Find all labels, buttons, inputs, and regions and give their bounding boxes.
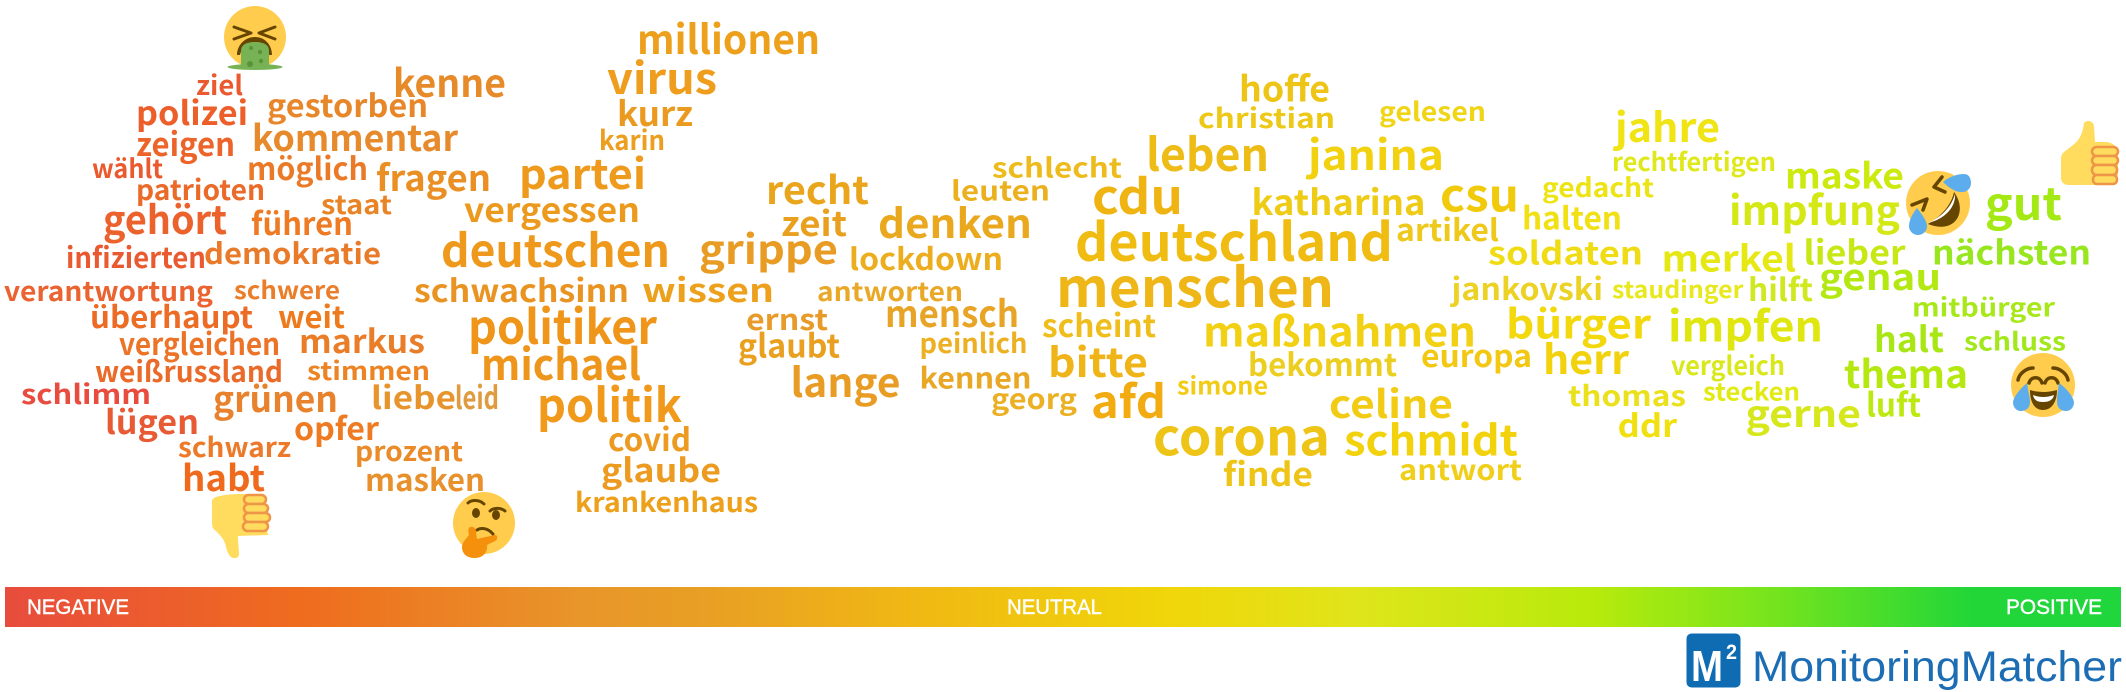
word group: negative terms: ziel <box>196 64 243 103</box>
word group: moderately negative terms: kommentar <box>252 110 458 162</box>
word group: neutral terms: janina <box>1305 122 1444 182</box>
word group: slightly negative terms: politiker <box>468 289 657 358</box>
word group: negative terms: überhaupt <box>90 293 253 337</box>
word group: moderately negative terms: stimmen <box>307 352 430 388</box>
word group: slightly negative terms: antworten <box>817 272 963 309</box>
word group: positive terms: ddr <box>1618 401 1678 446</box>
icon: rolling on the floor laughing emoji <box>1906 171 1971 235</box>
word group: neutral terms: finde <box>1223 449 1313 496</box>
word group: moderately negative terms: opfer <box>294 404 379 450</box>
word group: slightly negative terms: kurz <box>617 87 693 136</box>
word group: positive terms: rechtfertigen <box>1612 143 1776 179</box>
word group: slightly negative terms: schwachsinn <box>414 266 629 311</box>
word group: neutral terms: corona <box>1153 396 1330 470</box>
word group: slightly negative terms: glaube <box>601 445 721 492</box>
word group: slightly negative terms: peinlich <box>920 322 1028 361</box>
word group: neutral terms: schlecht <box>992 146 1122 186</box>
word group: neutral terms: bekommt <box>1248 340 1397 385</box>
word group: neutral terms: artikel <box>1396 206 1499 250</box>
word group: moderately negative terms: liebe <box>371 373 456 418</box>
word group: negative terms: polizei <box>136 87 248 135</box>
icon: thumbs down emoji <box>212 494 270 558</box>
word group: neutral terms: europa <box>1421 332 1532 376</box>
word group: moderately negative terms <box>204 53 506 500</box>
word group: negative terms: verantwortung <box>4 270 213 309</box>
word group: negative terms: schlimm <box>21 373 151 412</box>
word group: negative terms: lügen <box>105 396 199 444</box>
word group: negative terms: habt <box>182 450 265 502</box>
word group: positive terms: impfung <box>1729 178 1900 237</box>
icon: face with tears of joy emoji <box>2011 353 2075 417</box>
word group: positive terms: gut <box>1985 168 2062 233</box>
word group: slightly negative terms: michael <box>481 331 641 393</box>
label: negative: NEGATIVE <box>27 596 129 619</box>
word group: slightly negative terms <box>414 8 1077 520</box>
word group: positive terms: merkel <box>1662 230 1796 282</box>
word group: slightly negative terms: grippe <box>699 218 838 276</box>
word group: slightly negative terms: deutschen <box>441 215 670 280</box>
icon: vomiting face emoji <box>224 6 286 70</box>
word group: positive terms: lieber <box>1804 226 1906 274</box>
word group: slightly negative terms: mensch <box>885 284 1019 338</box>
word group: positive terms: vergleich <box>1671 346 1785 383</box>
word group: neutral terms: soldaten <box>1488 228 1643 274</box>
word group: slightly negative terms: partei <box>519 141 646 201</box>
word group: neutral terms: deutschland <box>1075 201 1393 276</box>
label: positive: POSITIVE <box>2006 596 2102 619</box>
word group: slightly negative terms: denken <box>878 192 1032 250</box>
word group: moderately negative terms: gestorben <box>267 81 428 126</box>
word group: negative terms: vergleichen <box>119 320 280 364</box>
word group: positive terms: hilft <box>1748 265 1813 310</box>
word group: positive terms: stecken <box>1703 373 1800 408</box>
word group: positive terms: thomas <box>1568 375 1686 415</box>
logo: MonitoringMatcher <box>1686 634 2122 691</box>
label: neutral: NEUTRAL <box>1007 596 1102 619</box>
word group: slightly negative terms: millionen <box>637 8 820 66</box>
word group: negative terms: zeigen <box>136 119 235 166</box>
word group: neutral terms: gelesen <box>1379 92 1486 129</box>
word group: slightly negative terms: vergessen <box>464 184 640 232</box>
word group: neutral terms: maßnahmen <box>1203 298 1476 358</box>
word group: moderately negative terms: prozent <box>355 430 463 469</box>
word group: negative terms: infizierten <box>66 235 206 277</box>
icon: thumbs up emoji <box>2061 121 2118 185</box>
word group: moderately negative terms: leid <box>455 373 499 418</box>
word group: slightly negative terms: wissen <box>642 265 774 312</box>
word group: slightly negative terms: kennen <box>920 356 1032 398</box>
word group: slightly negative terms: ernst <box>746 297 828 339</box>
word group: neutral terms: schmidt <box>1344 408 1518 468</box>
word group: positive terms: jahre <box>1612 96 1720 154</box>
word group: neutral terms: csu <box>1440 160 1519 224</box>
word group: moderately negative terms: staat <box>321 185 392 222</box>
logo wordmark: MonitoringMatcher <box>1752 643 2122 691</box>
word group: slightly negative terms: recht <box>766 160 869 215</box>
word group: neutral terms: afd <box>1091 366 1166 431</box>
word group: positive terms: thema <box>1844 344 1968 399</box>
word group: positive terms: genau <box>1819 249 1941 301</box>
word group: slightly negative terms: glaubt <box>738 320 840 368</box>
word group: neutral terms: katharina <box>1252 175 1426 226</box>
word group: slightly negative terms: lockdown <box>849 235 1003 279</box>
word group: slightly negative terms: virus <box>607 45 717 107</box>
word group: moderately negative terms: markus <box>299 316 425 363</box>
word group: moderately negative terms: masken <box>365 456 485 500</box>
word group: positive terms: gedacht <box>1542 168 1654 205</box>
word group: negative terms <box>4 64 291 502</box>
word group: neutral terms: antwort <box>1399 449 1522 489</box>
word group: neutral terms <box>992 62 1652 496</box>
word group: slightly negative terms: krankenhaus <box>575 481 758 520</box>
word group: negative terms: wählt <box>92 149 163 186</box>
logo mark: M squared: 2 <box>1726 641 1737 664</box>
word group: slightly negative terms: zeit <box>781 197 847 246</box>
word group: neutral terms: leben <box>1146 119 1269 184</box>
word group: slightly negative terms: georg <box>991 378 1077 418</box>
word group: positive terms: schluss <box>1964 322 2066 358</box>
word group: neutral terms: bitte <box>1048 331 1148 389</box>
word group: positive terms: halt <box>1874 312 1944 363</box>
word group: slightly negative terms: karin <box>599 119 665 158</box>
word group: slightly negative terms: politik <box>537 370 682 436</box>
word group: neutral terms: celine <box>1329 374 1453 429</box>
word group: neutral terms: hoffe <box>1239 62 1330 113</box>
word group: positive terms: mitbürger <box>1912 288 2055 324</box>
word group: moderately negative terms: möglich <box>247 144 368 189</box>
word group: slightly negative terms: lange <box>790 351 900 409</box>
word group: positive terms: halten <box>1522 194 1622 238</box>
word group: positive terms: staudinger <box>1612 271 1744 305</box>
word group: positive terms: luft <box>1866 380 1921 427</box>
word group: neutral terms: scheint <box>1042 301 1156 346</box>
word group: negative terms: weißrussland <box>95 349 283 391</box>
word group: neutral terms: bürger <box>1506 292 1652 350</box>
word group: negative terms: schwarz <box>178 426 291 465</box>
word group: neutral terms: menschen <box>1056 244 1334 323</box>
word group: moderately negative terms: fragen <box>376 150 491 202</box>
word group: positive terms: maske <box>1785 148 1904 200</box>
word group: neutral terms: herr <box>1543 328 1630 386</box>
logo mark: M squared: M <box>1691 642 1723 691</box>
word group: negative terms: patrioten <box>136 169 265 209</box>
word group: neutral terms: jankovski <box>1449 265 1603 309</box>
word group: positive terms: impfen <box>1668 294 1823 355</box>
sentiment gradient legend bar <box>5 587 2121 627</box>
word group: slightly negative terms: leuten <box>951 170 1050 208</box>
word group: moderately negative terms: führen <box>251 199 353 244</box>
word group: neutral terms: christian <box>1198 97 1335 136</box>
word group: moderately negative terms: weit <box>278 293 345 337</box>
word group: positive terms <box>1522 96 2091 446</box>
word group: positive terms: nächsten <box>1932 226 2091 274</box>
word group: neutral terms: cdu <box>1092 158 1183 228</box>
word group: moderately negative terms: grünen <box>213 371 338 423</box>
word group: positive terms: gerne <box>1746 384 1861 438</box>
word group: moderately negative terms: schwere <box>234 272 340 307</box>
word group: slightly negative terms: covid <box>608 415 691 461</box>
word group: negative terms: gehört <box>103 190 227 246</box>
word group: moderately negative terms: demokratie <box>204 231 381 273</box>
icon: thinking face emoji <box>453 492 515 558</box>
word group: moderately negative terms: kenne <box>393 53 506 108</box>
logo mark: M squared <box>1686 634 1740 691</box>
word group: neutral terms: simone <box>1177 368 1268 403</box>
